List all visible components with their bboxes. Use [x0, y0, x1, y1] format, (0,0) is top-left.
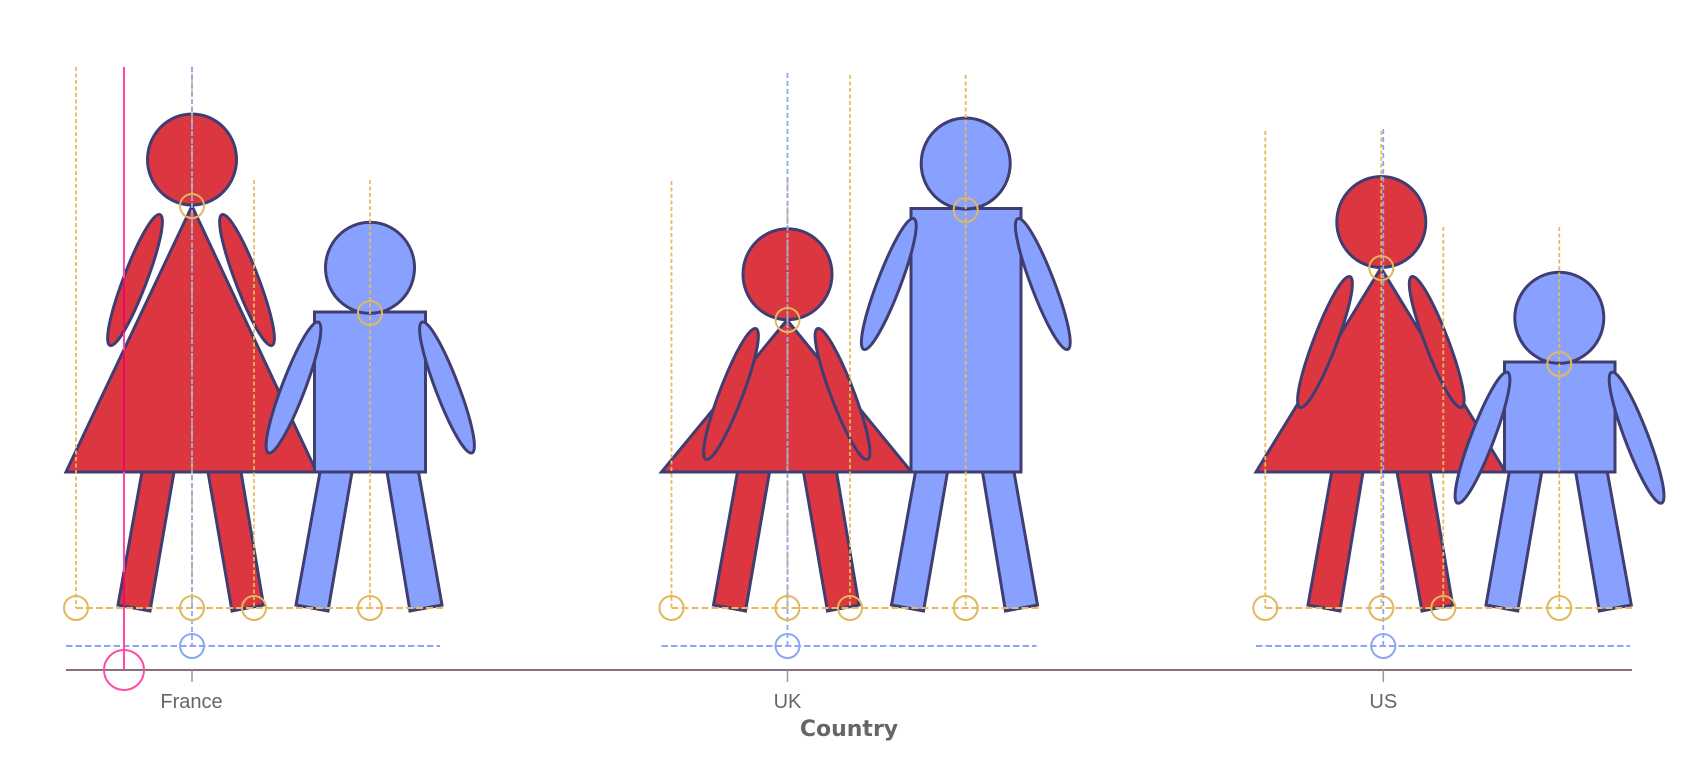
pink marker — [104, 67, 144, 690]
woman figure: UK — [662, 229, 912, 611]
label: UK: UK — [774, 691, 802, 713]
axis title: Country — [800, 717, 898, 742]
label: France: France — [160, 691, 223, 713]
blue anchor circles — [180, 634, 1395, 658]
gold anchor circles — [64, 194, 1571, 620]
man figure: UK — [853, 118, 1079, 611]
label: US: US — [1369, 691, 1397, 713]
man figure: France — [258, 222, 483, 611]
woman figure: US — [1256, 176, 1506, 611]
blue guide lines — [66, 67, 1630, 646]
x axis — [66, 670, 1632, 682]
man figure: US — [1447, 272, 1672, 611]
woman figure: France — [66, 114, 316, 611]
gold guide lines — [76, 67, 1632, 608]
